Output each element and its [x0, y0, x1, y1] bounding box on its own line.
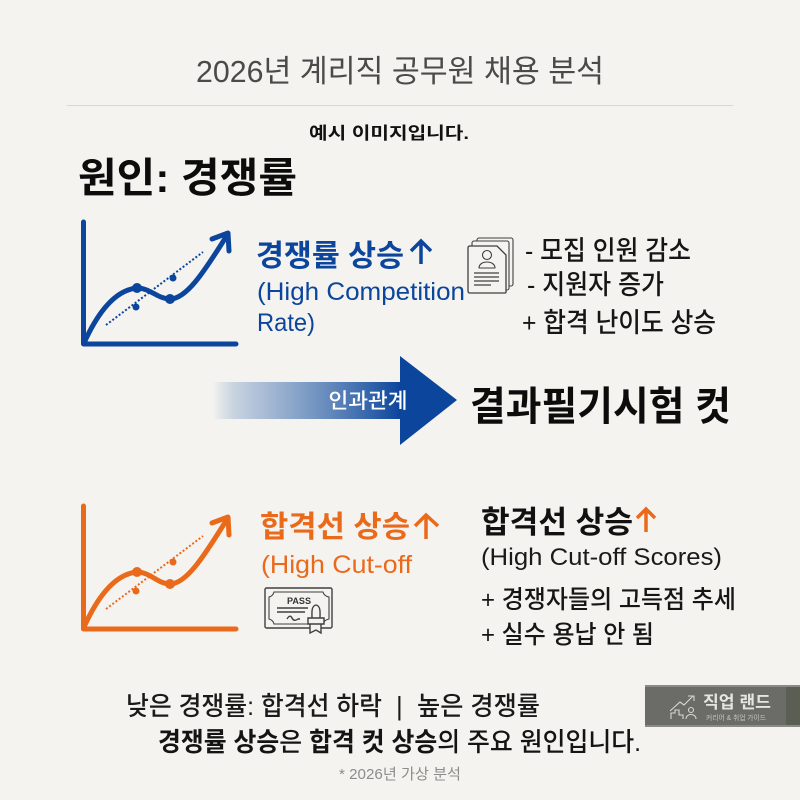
blue subtext: high competition rate: (High Competition	[257, 278, 465, 306]
logo name: 직업 랜드	[703, 693, 771, 712]
chart: cut-off rising	[84, 506, 236, 629]
icon: pass certificate	[265, 588, 332, 633]
summary line one: |	[396, 691, 403, 721]
logo badge	[645, 685, 800, 727]
arrow: causal relationship	[213, 356, 457, 445]
list: competition causes	[522, 236, 716, 338]
orange subtext: high cut-off: (High Cut-off	[261, 551, 412, 579]
result heading: 결과필기시험 컷	[470, 385, 731, 429]
list: cut-off causes: + 실수 용납 안 됨	[481, 621, 654, 649]
summary line two: 경쟁률 상승은 합격 컷 상승의 주요 원인입니다.	[158, 727, 641, 757]
title: 2026년 계리직 공무원 채용 분석	[196, 54, 604, 89]
icon: orange up arrow	[637, 509, 655, 532]
heading: cause: 원인: 경쟁률	[78, 155, 297, 201]
list: cut-off causes: + 경쟁자들의 고득점 추세	[481, 586, 736, 614]
blue subtext: high competition rate	[257, 278, 465, 337]
list: competition causes: + 합격 난이도 상승	[522, 308, 716, 338]
footnote: * 2026년 가상 분석	[339, 766, 461, 783]
right heading: cut-off up: 합격선 상승	[481, 505, 633, 540]
blue subtext: high competition rate: Rate)	[257, 309, 315, 337]
orange heading: cut-off up: 합격선 상승	[260, 511, 410, 544]
chart: competition rate rising	[84, 222, 236, 344]
arrow label: 인과관계	[328, 390, 408, 413]
logo icon	[670, 696, 696, 719]
list: competition causes: - 모집 인원 감소	[525, 236, 691, 266]
logo tagline: 커리어 & 취업 가이드	[706, 713, 767, 722]
icon: blue up arrow	[411, 241, 431, 264]
sample image notice: 예시 이미지입니다.	[309, 124, 469, 143]
list: cut-off causes	[481, 586, 736, 649]
icon: stacked resumes	[468, 238, 513, 293]
list: competition causes: - 지원자 증가	[527, 270, 664, 300]
right subtext: high cut-off scores: (High Cut-off Scores)	[481, 544, 722, 571]
icon: orange up arrow	[415, 515, 438, 539]
summary line one: 낮은 경쟁률: 합격선 하락	[126, 691, 382, 721]
summary line one	[126, 691, 540, 721]
certificate pass label: PASS	[287, 596, 311, 606]
blue heading: competition rate up: 경쟁률 상승	[256, 240, 404, 273]
summary line one: 높은 경쟁률	[417, 691, 540, 721]
